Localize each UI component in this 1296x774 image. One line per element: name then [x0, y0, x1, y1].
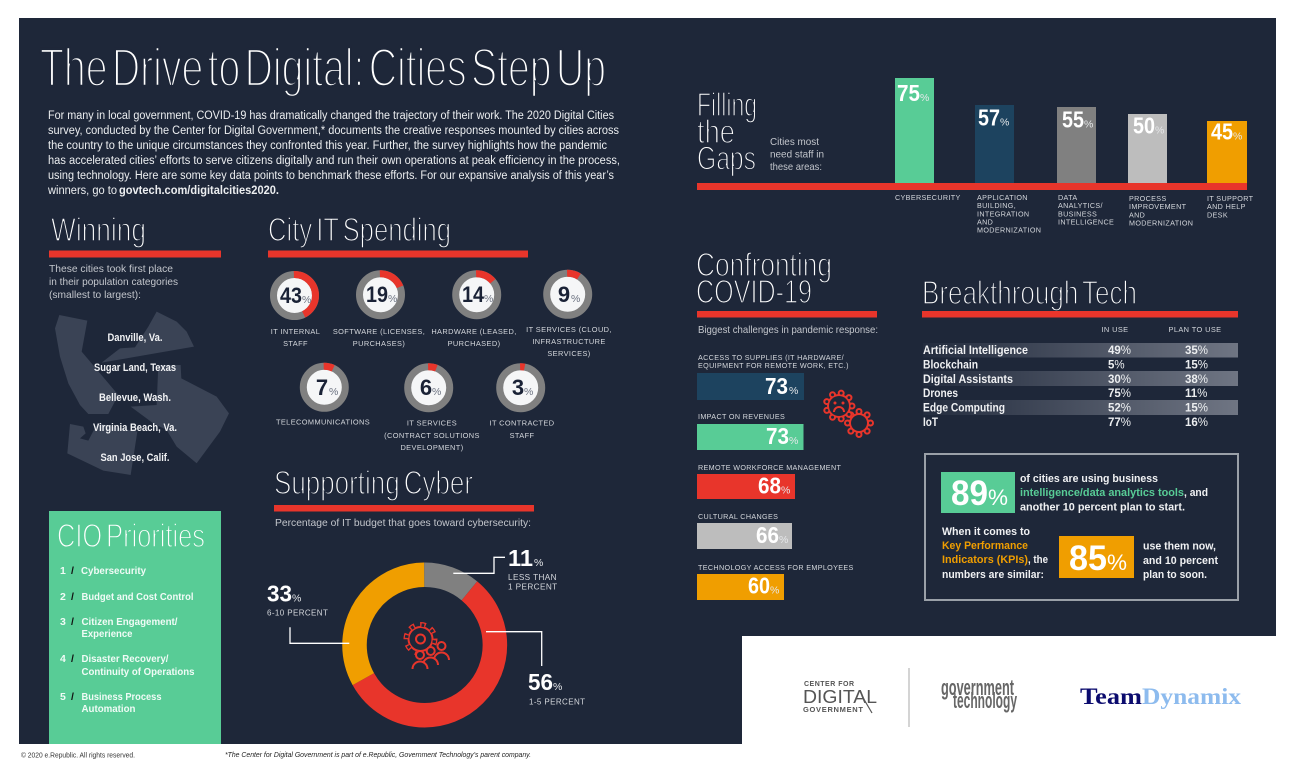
- bar: 45% IT support: AND HELP: [1207, 202, 1246, 211]
- donut: 19% software: 19: [366, 282, 388, 307]
- donut: 7% telecommunications: TELECOMMUNICATIONS: [276, 418, 370, 426]
- donut: 19% software: [333, 274, 425, 348]
- table: technology adoption: 75%: [1108, 388, 1131, 400]
- donut chart: cybersecurity budget share: [354, 575, 495, 715]
- bar: access to supplies 73%: ACCESS TO SUPPLIES (IT HARDWARE/: [698, 353, 844, 362]
- donut: 6% IT services contract: DEVELOPMENT): [400, 443, 464, 452]
- callout: 11 percent: 11: [508, 545, 533, 571]
- priority list: 2: [60, 591, 66, 603]
- bar: 50% process improvement: %: [1155, 124, 1164, 136]
- bar: remote workforce management 68%: [697, 463, 841, 499]
- bar: 57% application building: AND: [977, 218, 993, 226]
- table: technology adoption: Blockchain: [923, 360, 978, 372]
- heading: Confronting COVID-19: [696, 246, 832, 310]
- bar: 57% application building: 57: [978, 104, 1000, 130]
- priority list: Cybersecurity: [81, 565, 146, 577]
- bar: technology access 60%: 60: [748, 572, 770, 598]
- callout: 33 percent: [267, 580, 328, 618]
- donut: 9% IT services cloud: SERVICES): [547, 349, 591, 358]
- priority list: /: [71, 591, 74, 603]
- priority list: /: [71, 653, 74, 665]
- priority list: Continuity of Operations: [82, 666, 195, 678]
- icon: gear and people: [406, 624, 449, 669]
- bar: 57% application building: INTEGRATION: [977, 210, 1029, 218]
- callout: 33 percent: 6-10 PERCENT: [267, 608, 328, 618]
- priority list: Business Process: [82, 691, 162, 703]
- bar: 50% process improvement: PROCESS: [1129, 194, 1167, 203]
- heading: Supporting Cyber: Supporting Cyber: [274, 464, 473, 501]
- donut: 43% IT internal staff: [271, 274, 320, 348]
- table: technology adoption: IoT: [923, 417, 938, 429]
- table: technology adoption: Digital Assistants: [923, 374, 1013, 386]
- donut: 3% IT contracted staff: [489, 367, 555, 440]
- callout: 56 percent: %: [553, 681, 562, 693]
- bar: 45% IT support: 45: [1211, 118, 1233, 144]
- bar: 55% data analytics: [1057, 106, 1114, 226]
- panel: Breakthrough Tech: [922, 274, 1238, 600]
- priority list: [60, 565, 195, 715]
- stat: 89%: 89: [951, 474, 988, 513]
- stat: 85%: [1059, 536, 1134, 578]
- donut: 14% hardware: HARDWARE (LEASED,: [431, 327, 517, 336]
- priority list: 1: [60, 565, 66, 577]
- table: technology adoption: 35%: [1185, 345, 1208, 357]
- footer: footnote: *The Center for Digital Government is part of e.Republic, Government Technology’s parent company.: [225, 750, 531, 759]
- table: technology adoption: IN USE: [1101, 325, 1129, 334]
- donut: 14% hardware: 14: [462, 282, 485, 307]
- callout: 11 percent: LESS THAN: [508, 573, 557, 582]
- winning cities list: Virginia Beach, Va.: [93, 422, 177, 434]
- bar: 45% IT support: IT SUPPORT: [1207, 194, 1254, 203]
- bar: 57% application building: APPLICATION: [977, 193, 1028, 202]
- priority list: Experience: [82, 628, 133, 640]
- bar: impact on revenues 73%: [697, 412, 804, 450]
- donut: 43% IT internal staff: STAFF: [283, 339, 308, 348]
- donut: 19% software: %: [388, 293, 397, 305]
- text: KPIs: , the: [1028, 554, 1048, 566]
- priority list: /: [71, 691, 74, 703]
- table: technology adoption: Edge Computing: [923, 402, 1005, 414]
- intro text block: govtech.com/digitalcities2020.: [119, 185, 279, 197]
- Supporting Cyber description: Percentage of IT budget that goes toward cybersecurity:: [275, 517, 531, 529]
- text: business intelligence: intelligence/data analytics tools: [1020, 487, 1184, 499]
- heading: Breakthrough Tech: Breakthrough Tech: [922, 274, 1137, 311]
- bar: technology access 60%: [697, 563, 854, 600]
- priority list: 4: [60, 653, 66, 665]
- donut: 6% IT services contract: %: [432, 386, 441, 398]
- donut: 19% software: PURCHASES): [353, 339, 405, 348]
- donut: 7% telecommunications: %: [329, 386, 338, 398]
- heading: Filling the Gaps: Filling: [697, 86, 757, 123]
- heading: Confronting COVID-19: Confronting: [696, 246, 832, 283]
- bar: 45% IT support: %: [1233, 130, 1242, 142]
- donut: 3% IT contracted staff: 3: [512, 375, 524, 400]
- stat: 89%: %: [988, 485, 1008, 510]
- panel: Winning: [49, 211, 229, 475]
- intro text block: the country to the unique circumstances they confronted this year. Further, the survey highlights how the pandemic: [48, 140, 607, 152]
- table: technology adoption: 11%: [1185, 388, 1207, 400]
- bar chart: staffing needs: [697, 78, 1254, 234]
- donut: 6% IT services contract: (CONTRACT SOLUTIONS: [384, 431, 480, 440]
- bar: impact on revenues 73%: 73: [766, 423, 789, 449]
- text: business intelligence: of cities are using business: [1020, 473, 1158, 485]
- table: technology adoption: 38%: [1185, 374, 1208, 386]
- callout: 56 percent: [528, 669, 585, 706]
- text: use them now: [1143, 540, 1218, 581]
- priority list: /: [71, 616, 74, 628]
- bar: 45% IT support: DESK: [1207, 210, 1228, 220]
- stat: 89%: [941, 472, 1015, 513]
- donut: 14% hardware: [431, 274, 517, 348]
- heading: CIO Priorities: CIO Priorities: [57, 517, 205, 554]
- priority list: 5: [60, 691, 66, 703]
- bar: remote workforce management 68%: REMOTE WORKFORCE MANAGEMENT: [698, 463, 841, 472]
- intro text block: has accelerated cities’ efforts to serve citizens digitally and run their own operations at peak efficiency in the process,: [48, 155, 620, 167]
- bar: access to supplies 73%: 73: [765, 373, 788, 399]
- logo: Government Technology: government: [941, 675, 1014, 700]
- bar: 50% process improvement: MODERNIZATION: [1129, 218, 1193, 228]
- table: technology adoption: Drones: [923, 388, 958, 400]
- callout: 33 percent: %: [292, 592, 301, 604]
- bar: 75% cybersecurity: %: [920, 92, 929, 104]
- text: KPIs: numbers are similar:: [942, 569, 1044, 581]
- Winning description: [49, 263, 178, 301]
- map: state silhouettes: [55, 312, 229, 475]
- bar: remote workforce management 68%: 68: [758, 472, 781, 498]
- panel: City IT Spending: [268, 211, 612, 452]
- winning cities list: [93, 332, 177, 464]
- donut: 14% hardware: PURCHASED): [448, 339, 500, 348]
- bar: remote workforce management 68%: %: [781, 484, 790, 496]
- logo: Center for Digital Government: CENTER FOR: [804, 681, 854, 688]
- bar: 50% process improvement: 50: [1133, 112, 1155, 138]
- intro text block: For many in local government, COVID-19 has dramatically changed the trajectory of their work. The 2020 Digital Cities: [48, 110, 614, 122]
- bar: 57% application building: [975, 104, 1041, 234]
- heading: City IT Spending: City IT Spending: [268, 211, 451, 248]
- intro text block: survey, conducted by the Center for Digital Government,* documents the creative responses mounted by cities across: [48, 125, 619, 137]
- Winning description: (smallest to largest):: [49, 289, 141, 301]
- bar: access to supplies 73%: [697, 353, 849, 400]
- table: technology adoption: 5%: [1108, 360, 1125, 372]
- bar: 57% application building: BUILDING,: [977, 201, 1016, 210]
- footer: copyright: © 2020 e.Republic. All rights reserved.: [21, 750, 135, 760]
- bar: 55% data analytics: DATA: [1058, 193, 1078, 202]
- bar: 55% data analytics: ANALYTICS/: [1058, 201, 1103, 210]
- donut: 6% IT services contract: [384, 367, 480, 452]
- bar: access to supplies 73%: %: [789, 385, 798, 397]
- priority list: Disaster Recovery/: [82, 653, 169, 665]
- text: use them now: and 10 percent: [1143, 555, 1218, 567]
- donut: 6% IT services contract: IT SERVICES: [407, 418, 457, 428]
- bar: 55% data analytics: BUSINESS: [1058, 210, 1097, 218]
- priority list: 3: [60, 616, 66, 628]
- table: technology adoption: PLAN TO USE: [1168, 325, 1222, 334]
- donut: 3% IT contracted staff: %: [524, 386, 533, 398]
- stat: 85%: %: [1107, 550, 1127, 575]
- callout: 56 percent: 1-5 PERCENT: [529, 698, 585, 706]
- bar: access to supplies 73%: EQUIPMENT FOR REMOTE WORK, ETC.): [698, 361, 849, 370]
- bar: cultural changes 66%: 66: [756, 522, 779, 548]
- callout: 56 percent: 56: [528, 669, 553, 695]
- bar: 55% data analytics: 55: [1062, 106, 1084, 132]
- logo: Center for Digital Government: DIGITAL: [803, 687, 877, 707]
- donut: 43% IT internal staff: %: [302, 294, 311, 306]
- text: KPIs: Key Performance: [942, 540, 1028, 552]
- callout: 11 percent: %: [534, 557, 543, 569]
- Filling the Gaps description: need staff in: [770, 148, 824, 160]
- text: use them now: plan to soon.: [1143, 569, 1207, 581]
- panel: CIO Priorities: [49, 511, 221, 744]
- Winning description: These cities took first place: [49, 263, 173, 275]
- logo: TeamDynamix: Team: [1080, 684, 1142, 709]
- bar: cultural changes 66%: [697, 512, 792, 549]
- donut: 9% IT services cloud: INFRASTRUCTURE: [532, 337, 606, 346]
- heading: Winning: Winning: [51, 211, 146, 248]
- callout: 11 percent: 1 PERCENT: [508, 582, 558, 592]
- bar: 50% process improvement: IMPROVEMENT: [1129, 202, 1187, 211]
- bar: 55% data analytics: INTELLIGENCE: [1058, 218, 1114, 226]
- bar: 55% data analytics: %: [1084, 118, 1093, 130]
- donut: 7% telecommunications: [276, 366, 370, 426]
- table: technology adoption: 15%: [1185, 360, 1208, 372]
- donut: 14% hardware: %: [484, 293, 493, 305]
- donut: 43% IT internal staff: IT INTERNAL: [271, 327, 320, 336]
- intro text block: [47, 110, 620, 197]
- donut: 7% telecommunications: 7: [316, 375, 328, 400]
- text: KPIs: Indicators (KPIs): [942, 554, 1028, 566]
- donut: 3% IT contracted staff: IT CONTRACTED: [489, 418, 555, 428]
- donut: 19% software: SOFTWARE (LICENSES,: [333, 327, 425, 336]
- leader lines: [290, 557, 542, 666]
- priority list: Citizen Engagement/: [82, 616, 178, 628]
- icon: virus: [826, 393, 870, 434]
- COVID description: Biggest challenges in pandemic response:: [698, 324, 878, 336]
- table: technology adoption: 77%: [1108, 417, 1131, 429]
- logo: TeamDynamix: [1080, 684, 1242, 709]
- bar: 50% process improvement: [1128, 112, 1193, 228]
- donut: 43% IT internal staff: 43: [280, 283, 302, 308]
- text: business intelligence: , and: [1184, 487, 1208, 499]
- winning cities list: Sugar Land, Texas: [94, 362, 176, 374]
- logo: Government Technology: [941, 675, 1017, 713]
- logo: Center for Digital Government: [803, 681, 877, 714]
- bar: 75% cybersecurity: [895, 78, 961, 202]
- table: technology adoption: Artificial Intelligence: [923, 345, 1028, 357]
- bar: cultural changes 66%: %: [779, 534, 788, 546]
- table: technology adoption: [923, 325, 1238, 429]
- table: technology adoption: 30%: [1108, 374, 1131, 386]
- bar: 75% cybersecurity: 75: [897, 80, 920, 106]
- table: technology adoption: 15%: [1185, 402, 1208, 414]
- table: technology adoption: 52%: [1108, 402, 1131, 414]
- winning cities list: San Jose, Calif.: [100, 452, 170, 464]
- text: KPIs: [942, 526, 1048, 581]
- intro text block: using technology. Here are some key data points to benchmark these efforts. For our expansive analysis of this year’s: [48, 170, 614, 182]
- winning cities list: Bellevue, Wash.: [99, 392, 171, 404]
- donut: 3% IT contracted staff: STAFF: [510, 431, 535, 440]
- bar: 75% cybersecurity: CYBERSECURITY: [895, 193, 961, 202]
- title: The Drive to Digital: Cities Step Up: [40, 38, 606, 98]
- callout: 11 percent: [508, 545, 558, 592]
- logo panel: [742, 636, 1276, 750]
- Filling the Gaps description: these areas:: [770, 161, 822, 173]
- donut: 9% IT services cloud: [526, 273, 612, 358]
- bar: 50% process improvement: AND: [1129, 210, 1145, 220]
- bar: impact on revenues 73%: %: [789, 435, 798, 447]
- heading: Filling the Gaps: [697, 86, 757, 176]
- donut: 9% IT services cloud: IT SERVICES (CLOUD,: [526, 325, 612, 334]
- text: business intelligence: [1020, 473, 1208, 514]
- donut: 9% IT services cloud: %: [571, 293, 580, 305]
- bar: 57% application building: MODERNIZATION: [977, 226, 1041, 234]
- table: technology adoption: 16%: [1185, 417, 1208, 429]
- priority list: /: [71, 565, 74, 577]
- text: use them now: use them now,: [1143, 540, 1216, 552]
- table: technology adoption: 49%: [1108, 345, 1131, 357]
- text: KPIs: When it comes to: [942, 526, 1030, 538]
- text: business intelligence: another 10 percent plan to start.: [1020, 502, 1185, 514]
- priority list: Budget and Cost Control: [82, 591, 194, 603]
- stat: 85%: 85: [1069, 539, 1107, 578]
- bar: cultural changes 66%: CULTURAL CHANGES: [698, 512, 778, 521]
- priority list: Automation: [82, 703, 136, 715]
- bar: technology access 60%: %: [770, 584, 779, 596]
- callout: 33 percent: 33: [267, 580, 292, 606]
- bar: impact on revenues 73%: IMPACT ON REVENUES: [698, 412, 785, 421]
- Winning description: in their population categories: [49, 276, 178, 288]
- donut: 9% IT services cloud: 9: [558, 282, 570, 307]
- panel: Supporting Cyber: [267, 464, 585, 715]
- Filling the Gaps description: [770, 136, 824, 173]
- bar: technology access 60%: TECHNOLOGY ACCESS FOR EMPLOYEES: [698, 563, 854, 572]
- logo: TeamDynamix: Dynamix: [1142, 684, 1242, 709]
- panel: Confronting COVID-19: [696, 246, 878, 600]
- heading: Confronting COVID-19: COVID-19: [696, 273, 812, 310]
- intro text block: winners, go to: [47, 185, 117, 197]
- heading: Filling the Gaps: Gaps: [697, 140, 756, 176]
- bar: 57% application building: %: [1000, 116, 1009, 128]
- bar: 45% IT support: [1207, 118, 1254, 220]
- panel: Filling the Gaps: [697, 78, 1254, 234]
- donut: 6% IT services contract: 6: [420, 375, 432, 400]
- logo: Center for Digital Government: GOVERNMENT: [803, 705, 863, 714]
- logo: Government Technology: technology: [953, 688, 1017, 713]
- heading: Filling the Gaps: the: [697, 113, 735, 150]
- callout box: analytics and KPIs: [925, 454, 1238, 600]
- Filling the Gaps description: Cities most: [770, 136, 819, 148]
- winning cities list: Danville, Va.: [108, 332, 162, 344]
